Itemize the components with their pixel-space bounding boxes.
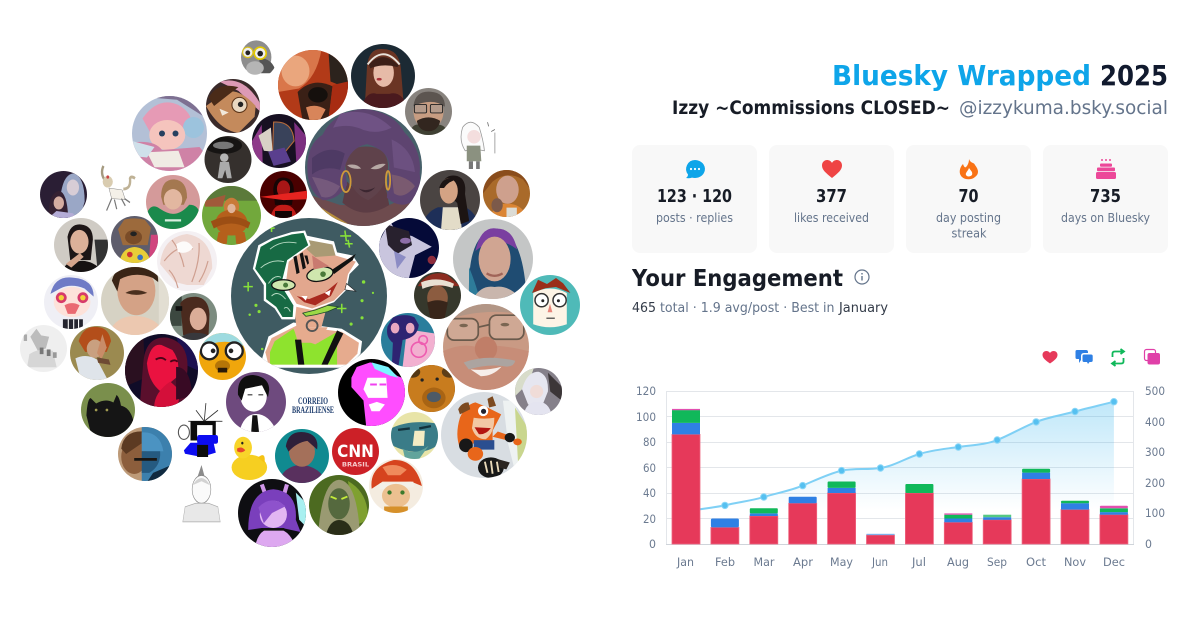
- avatar: brown bear plush: [405, 365, 457, 412]
- avatar: man drawn on purple: [226, 372, 286, 432]
- icon: birthday cake: [1096, 159, 1116, 179]
- avatar: two dark-haired girls purple: [40, 171, 87, 218]
- display name and handle: Izzy ~Commissions CLOSED~: [672, 97, 950, 119]
- stat card: likes received: likes received: [794, 211, 869, 225]
- avatar: teal tinted face close-up: [391, 412, 438, 459]
- stat card: day posting streak: streak: [952, 226, 987, 240]
- avatar: woman in navy blazer: [420, 170, 480, 230]
- avatar: purple armored figure: [252, 114, 306, 168]
- legend: reposts arrows: [1112, 349, 1124, 366]
- avatar bubble cluster: [20, 40, 580, 547]
- month labels: May: [830, 555, 853, 569]
- right axis labels: [1145, 384, 1165, 551]
- right axis labels: 200: [1145, 476, 1165, 490]
- avatar: woman with blue-purple hair: [453, 219, 533, 299]
- avatar: woman under red neon: [125, 334, 198, 407]
- avatar: grey owl: [241, 40, 276, 75]
- left axis labels: 100: [636, 410, 656, 424]
- character head: [284, 235, 359, 310]
- cumulative line points: [722, 398, 1117, 509]
- avatar: brown bear puppet: [111, 216, 158, 263]
- stat card: day posting streak: 70: [958, 186, 978, 207]
- cumulative line: [686, 402, 1114, 512]
- icon: info: [855, 270, 869, 284]
- avatar: skeleton creature: [102, 166, 135, 211]
- avatar: pencil sketch white hair: [157, 231, 217, 291]
- display name and handle: @izzykuma.bsky.social: [959, 97, 1168, 119]
- avatar: selfie woman in glasses room: [170, 293, 217, 340]
- avatar: orangutan on grass: [202, 186, 261, 245]
- avatar: dark alien figure: [204, 136, 252, 183]
- avatar: bearded man in Santa hat: [414, 272, 461, 319]
- avatar: pink and cyan pixel man: [338, 359, 405, 426]
- stacked bars: [672, 409, 1128, 544]
- stat card: likes received: [769, 145, 894, 253]
- avatar: red-haired headband hero: [369, 459, 423, 513]
- character eyes: [272, 280, 295, 290]
- month labels: [676, 555, 1125, 569]
- legend: quotes squares: [1144, 350, 1160, 364]
- month labels: Apr: [793, 555, 813, 569]
- avatar: older man with glasses and mustache: [443, 304, 529, 390]
- avatar: pink-haired anime girl reading: [132, 96, 207, 171]
- avatar: Correio Braziliense logo: [292, 396, 334, 415]
- avatar: main green-haired character: [231, 218, 387, 374]
- avatar: half sepia half blue portrait: [118, 427, 172, 481]
- month labels: Jul: [911, 555, 926, 569]
- left axis labels: 120: [636, 384, 656, 398]
- avatar: smiling man with curly hair and mustache: [101, 264, 169, 335]
- stat card: day posting streak: [906, 145, 1031, 253]
- chart legend icons: [1042, 349, 1160, 366]
- month labels: Mar: [754, 555, 775, 569]
- avatar: purple-haired horned girl: [238, 479, 306, 547]
- left axis labels: 60: [643, 461, 656, 475]
- avatar: yellow rubber duck: [232, 437, 267, 480]
- avatar: CNN Brasil logo: [332, 428, 379, 475]
- avatar: sketched figure with party hat: [183, 465, 220, 522]
- avatar: woman in red light: [260, 171, 307, 218]
- stat card: days on Bluesky: [1043, 145, 1168, 253]
- icon: flame: [960, 159, 978, 179]
- right axis labels: 400: [1145, 415, 1165, 429]
- avatar: CNN Brasil logo: CNN: [337, 441, 374, 461]
- avatar: white-haired anime character: [515, 368, 562, 415]
- stat card: days on Bluesky: 735: [1090, 186, 1121, 207]
- month labels: Nov: [1064, 555, 1086, 569]
- title: 2025: [1100, 59, 1168, 92]
- month labels: Aug: [947, 555, 969, 569]
- legend: replies bubbles: [1076, 350, 1093, 364]
- engagement summary line: 465: [632, 301, 656, 316]
- cumulative area: [686, 402, 1114, 544]
- avatar: chibi anime kid: [44, 275, 98, 329]
- avatar: pink hat character: [206, 79, 260, 133]
- avatar: wolf portrait: [379, 218, 439, 278]
- stat card: posts and replies: 123 · 120: [657, 186, 732, 207]
- stat card: posts and replies: posts · replies: [656, 211, 733, 225]
- avatar: blue and black doodle: [178, 403, 222, 457]
- right axis labels: 100: [1145, 506, 1165, 520]
- month labels: Dec: [1103, 555, 1125, 569]
- engagement summary line: January: [838, 301, 888, 316]
- month labels: Jun: [871, 555, 888, 569]
- avatar: sketch chibi girl: [461, 122, 495, 169]
- title: Bluesky Wrapped: [832, 59, 1091, 92]
- avatar: woman with headband: [351, 44, 415, 108]
- right axis labels: 500: [1145, 384, 1165, 398]
- avatar: Crash Bandicoot plush: [441, 392, 527, 478]
- icon: chat bubble: [686, 160, 705, 178]
- stat card: likes received: 377: [816, 186, 847, 207]
- legend: likes heart: [1042, 351, 1058, 364]
- avatar: woman resting chin on hand: [54, 218, 108, 272]
- left axis labels: 40: [643, 486, 656, 500]
- engagement summary line: total · 1.9 avg/post · Best in: [660, 301, 834, 316]
- icon: heart: [822, 160, 842, 178]
- avatar: black cat: [81, 383, 135, 437]
- stat card: days on Bluesky: days on Bluesky: [1061, 211, 1150, 225]
- avatar: orange dog with glasses: [199, 333, 246, 380]
- month labels: Sep: [987, 555, 1007, 569]
- character neck and collar: [293, 304, 328, 327]
- left axis labels: 20: [643, 512, 656, 526]
- stat card: day posting streak: day posting: [936, 211, 1001, 225]
- left axis labels: 80: [643, 435, 656, 449]
- heading: Your Engagement: Your Engagement: [631, 266, 843, 292]
- stat card: posts and replies: [632, 145, 757, 253]
- character body: [262, 323, 362, 368]
- avatar: Correio Braziliense logo: CORREIO: [298, 396, 328, 406]
- avatar: person in green shirt on pink: [146, 175, 200, 229]
- avatar: woman with curly purple hair, large: [305, 109, 422, 226]
- avatar: red-haired character: [70, 326, 124, 380]
- display name and handle: [672, 97, 1168, 119]
- avatar: red close-up face: [278, 50, 348, 120]
- avatar: man with glasses and beard: [405, 88, 452, 135]
- month labels: Feb: [715, 555, 735, 569]
- character green hair: [253, 230, 311, 319]
- month labels: Jan: [676, 555, 694, 569]
- month labels: Oct: [1026, 555, 1046, 569]
- avatar: grey sketch fox: [20, 325, 67, 372]
- avatar: purple cat with pink drawing: [381, 313, 435, 367]
- avatar: Correio Braziliense logo: BRAZILIENSE: [292, 405, 334, 415]
- character mouth: [292, 282, 338, 305]
- avatar: boy in purple hoodie: [275, 429, 329, 483]
- left axis labels: 0: [649, 537, 656, 551]
- avatar: green-glowing elf: [309, 475, 369, 535]
- avatar: bald man orange background: [483, 170, 530, 217]
- right axis labels: 0: [1145, 537, 1152, 551]
- right axis labels: 300: [1145, 445, 1165, 459]
- avatar: teal cartoon man with glasses: [520, 275, 580, 335]
- left axis labels: [636, 384, 656, 551]
- combo chart: monthly engagement: [636, 384, 1165, 569]
- avatar: CNN Brasil logo: BRASIL: [342, 462, 369, 469]
